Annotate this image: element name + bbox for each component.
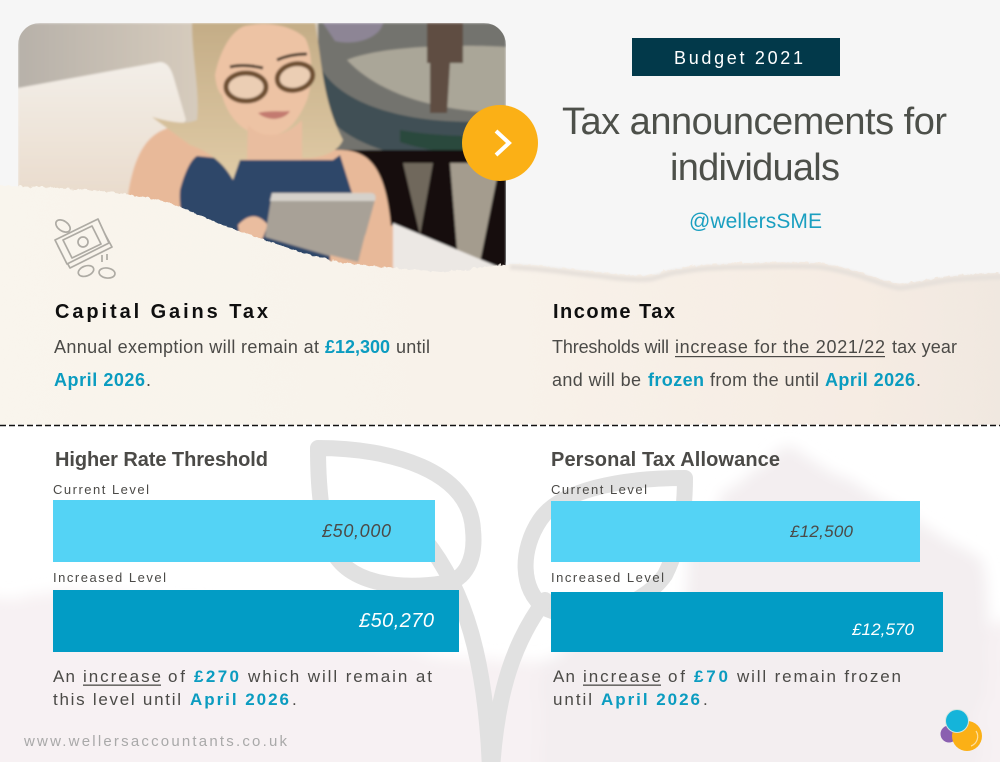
personal allowance note: increase [583,667,661,686]
bar: increased level 50,270 [53,590,459,652]
capital gains body text [54,337,430,390]
bar: current level 12,500: £12,500 [789,522,854,541]
title [562,101,947,189]
higher rate note [53,667,432,709]
panel: income tax [552,301,957,390]
bar: increased level 50,270: £50,270 [358,610,434,632]
higher rate note: increase [83,667,161,686]
capital gains body text: . [146,370,151,390]
watercolour background wash [0,447,1000,762]
capital gains body text: until [396,337,430,357]
higher rate note: this level until [53,690,181,709]
personal allowance note: will remain frozen [736,667,901,686]
dashed divider [0,424,1000,426]
income tax body text: . [916,370,921,390]
personal allowance note: . [703,690,708,709]
income tax body text: from the until [710,370,819,390]
title: Tax announcements for [562,101,947,143]
income tax body text: April 2026 [825,370,915,390]
higher rate note: £270 [194,667,239,686]
personal allowance note: of [668,667,685,686]
heading: higher rate threshold: Higher Rate Threshold [55,449,268,471]
income tax body text: Thresholds will [552,337,669,357]
capital gains body text: Annual exemption will remain at [54,337,319,357]
title: individuals [670,147,840,189]
panel: capital gains tax [54,301,430,390]
increased level label: Increased Level [53,570,166,585]
income tax body text: frozen [648,370,704,390]
higher rate note: April 2026 [190,690,289,709]
higher rate note: . [292,690,297,709]
income tax body text: and will be [552,370,641,390]
heading: personal tax allowance: Personal Tax Allowance [551,449,780,471]
budget badge: Budget 2021 [674,48,803,68]
income tax body text: increase for the 2021/22 [675,337,885,357]
bar: increased level 12,570: £12,570 [851,620,915,639]
personal allowance note [553,667,901,709]
personal allowance note: £70 [694,667,728,686]
next arrow button [462,105,538,181]
decorative plant outline [318,448,685,762]
capital gains body text: £12,300 [325,337,390,357]
higher rate note: An [53,667,75,686]
current level label: Current Level [551,482,647,497]
bar: current level 50,000 [53,500,435,562]
panel: personal tax allowance [551,449,943,709]
heading: capital gains tax: Capital Gains Tax [55,301,268,323]
heading: income tax: Income Tax [553,301,675,323]
personal allowance note: April 2026 [601,690,700,709]
higher rate note: which will remain at [247,667,432,686]
increased level label: Increased Level [551,570,664,585]
budget badge [632,38,840,76]
torn paper band [0,184,1000,425]
upper light grey background [0,0,1000,295]
capital gains body text: April 2026 [54,370,145,390]
photo: woman using a tablet [18,23,506,283]
bar: current level 50,000: £50,000 [321,521,391,541]
personal allowance note: An [553,667,575,686]
panel: higher rate threshold [53,449,459,709]
icon: banknote and coins [54,217,116,279]
personal allowance note: until [553,690,592,709]
social handle: @wellersSME [689,210,822,233]
website address: www.wellersaccountants.co.uk [23,733,288,750]
income tax body text [552,337,957,390]
income tax body text: tax year [892,337,957,357]
current level label: Current Level [53,482,149,497]
logo: three circles [940,710,982,751]
bar: current level 12,500 [551,501,920,562]
bar: increased level 12,570 [551,592,943,652]
torn paper grey rim [510,266,1000,288]
higher rate note: of [168,667,185,686]
